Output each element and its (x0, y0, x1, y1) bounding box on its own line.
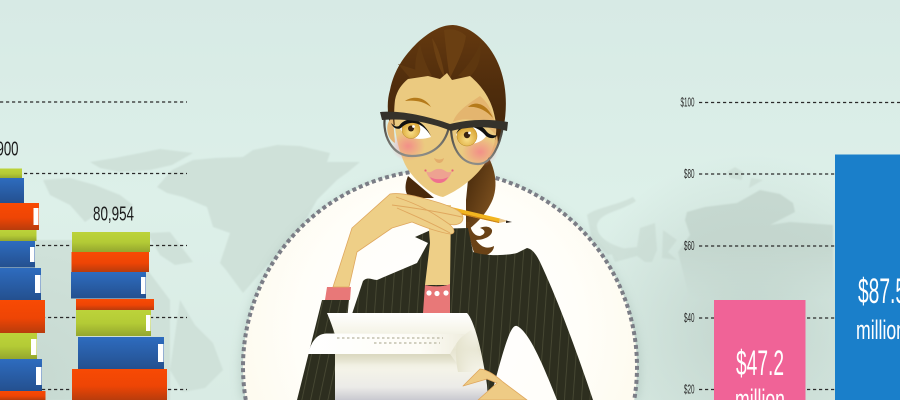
nose (434, 158, 444, 163)
ponytail (406, 150, 496, 256)
illustration: woman with notepad (297, 25, 593, 400)
blush (391, 131, 498, 167)
bar: pink $47.2 million (714, 300, 806, 400)
right eye (456, 123, 497, 146)
right chart axis labels: $100 (680, 96, 695, 110)
cuff (325, 287, 351, 300)
right chart axis labels: $20 (684, 382, 695, 396)
cheek shadow (453, 96, 496, 135)
face (394, 73, 496, 197)
right chart gridlines (699, 102, 900, 390)
right chart axis labels: $80 (684, 167, 695, 181)
hair top (388, 25, 506, 160)
world map: right landmasses (587, 167, 833, 300)
finger creases (392, 197, 462, 233)
notepad (308, 313, 488, 400)
right chart axis labels (680, 96, 695, 396)
jacket torso and right sleeve (350, 228, 593, 400)
ears (387, 118, 498, 158)
glasses (380, 112, 508, 164)
world map: left landmasses (0, 145, 360, 400)
left eye (391, 119, 431, 139)
right chart axis labels: $40 (684, 311, 695, 325)
book stack: left column (0, 168, 46, 400)
book stack: right column (71, 232, 167, 400)
pencil (446, 206, 512, 223)
eyebrows (405, 98, 493, 118)
circle backdrop with dashed rim (240, 170, 640, 400)
hand holding notepad (463, 369, 527, 400)
forearm and hand under chin (333, 194, 463, 287)
bar: blue $87.5 million (835, 154, 900, 400)
lips (424, 169, 454, 183)
neck (425, 205, 451, 285)
label: right column value: 80,954 (93, 204, 134, 226)
bar: pink $47.2 million: $47.2 (736, 344, 784, 383)
jacket left sleeve (297, 300, 349, 400)
pink top with beads (423, 284, 450, 313)
left chart gridlines (0, 102, 187, 390)
right chart axis labels: $60 (684, 239, 695, 253)
